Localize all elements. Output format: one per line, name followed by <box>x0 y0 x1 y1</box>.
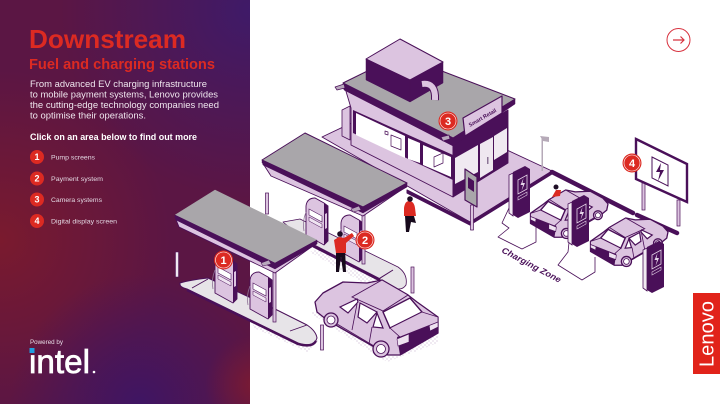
building: smart retail store <box>335 39 515 230</box>
next arrow button <box>667 28 690 52</box>
store sign <box>463 96 502 136</box>
camera pole <box>540 136 549 171</box>
camera right <box>441 135 450 141</box>
right wall <box>453 110 508 197</box>
bollard <box>411 267 414 293</box>
legend item 2: 2 <box>34 174 40 184</box>
stipple shadows <box>252 245 438 362</box>
legend item 1: Pump screens <box>51 154 95 162</box>
charging car A <box>531 190 608 239</box>
upper fuel island <box>283 219 406 289</box>
charging car B <box>591 218 668 267</box>
billboard bolt icon <box>652 157 668 186</box>
hotspot badge 3 <box>438 112 458 130</box>
intro paragraph: to mobile payment systems, Lenovo provides <box>30 90 218 100</box>
person behind charging car <box>552 184 561 197</box>
legend item 3 <box>30 192 102 206</box>
building platform <box>322 100 552 225</box>
charger 2 <box>568 195 589 247</box>
legend item 4 <box>30 214 118 228</box>
legend item 1: 1 <box>34 152 40 162</box>
background panel: gradient sidebar <box>0 0 250 404</box>
bollard <box>266 193 268 214</box>
powered by label: Powered by <box>30 339 64 346</box>
subtitle: Fuel and charging stations <box>29 57 215 73</box>
window strip <box>353 110 453 180</box>
roof slab <box>343 55 515 138</box>
legend item 4: 4 <box>34 216 40 226</box>
hotspot badge 3: 3 <box>445 116 451 128</box>
lower canopy <box>175 190 317 273</box>
call to action: Click on an area below to find out more <box>30 132 197 143</box>
upper pump B <box>338 215 363 262</box>
charging cables <box>498 208 595 280</box>
legend item 3: Camera systems <box>51 197 102 204</box>
intel logo: intel <box>29 343 90 380</box>
upper canopy column <box>362 210 365 264</box>
legend item 4: Digital display screen <box>51 218 118 226</box>
charger 3 <box>643 241 664 293</box>
hotspot badge 4 <box>622 154 642 172</box>
charger 1 <box>509 166 530 218</box>
hotspot badge 2 <box>356 230 374 250</box>
walking woman <box>404 196 416 232</box>
lower canopy column <box>273 266 276 322</box>
legend item 2: Payment system <box>51 176 103 183</box>
upper canopy <box>262 133 407 216</box>
legend item 1 <box>30 150 95 164</box>
roof plant box <box>366 39 443 102</box>
hotspot badge 2: 2 <box>362 235 368 247</box>
intro paragraph: to optimise their operations. <box>30 110 146 122</box>
hotspot badge 4: 4 <box>629 158 636 170</box>
legend item 3: 3 <box>34 194 40 204</box>
lower pump 1 <box>212 256 237 303</box>
store sign: Smart Retail <box>468 108 498 129</box>
legend item 2 <box>30 172 103 186</box>
bollard <box>176 252 178 277</box>
intro paragraph <box>30 79 219 122</box>
intro paragraph: the cutting-edge technology companies need <box>30 100 219 111</box>
charging zone label: Charging Zone <box>500 245 563 285</box>
title: Downstream <box>29 24 186 54</box>
Lenovo logo: Lenovo <box>696 301 718 367</box>
foreground car <box>315 280 438 357</box>
left wall <box>345 88 453 197</box>
upper pump A <box>303 198 328 245</box>
camera left <box>335 84 345 90</box>
lower fuel island <box>180 278 317 345</box>
Lenovo logo <box>693 293 720 374</box>
bollard <box>320 325 324 350</box>
curbs behind charging bays <box>552 172 677 233</box>
hotspot badge 1: 1 <box>220 255 227 267</box>
digital billboard <box>636 139 687 226</box>
intro paragraph: From advanced EV charging infrastructure <box>30 79 207 90</box>
hotspot badge 1 <box>214 250 233 270</box>
lower pump 2 <box>247 272 272 319</box>
attendant person <box>334 231 354 272</box>
building side column <box>342 106 350 140</box>
pole sign <box>465 169 477 230</box>
legend list <box>30 150 118 228</box>
